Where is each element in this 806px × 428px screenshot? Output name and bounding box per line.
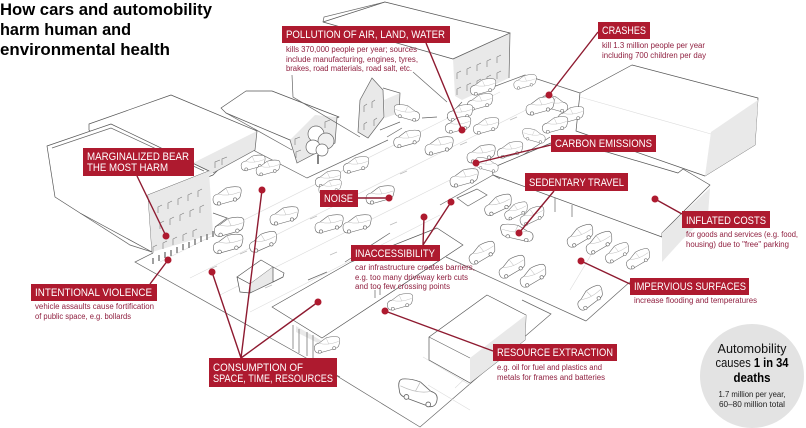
callout: crashes: including 700 children per day bbox=[602, 51, 706, 60]
callout: consumption of space, time, resources: SPACE, TIME, RESOURCES bbox=[213, 373, 333, 385]
stat circle: 1 in 34 deaths: deaths bbox=[734, 370, 770, 385]
callout: crashes: kill 1.3 million people per year bbox=[602, 41, 705, 50]
callout: crashes bbox=[546, 22, 706, 98]
building: rear block and gabled end bbox=[292, 2, 510, 138]
callout: crashes: CRASHES bbox=[602, 25, 646, 37]
callout: intentional violence: INTENTIONAL VIOLENCE bbox=[35, 287, 152, 299]
callout: marginalized: MARGINALIZED BEAR bbox=[87, 151, 189, 163]
callout: inaccessibility: INACCESSIBILITY bbox=[355, 248, 436, 260]
callout: inaccessibility: car infrastructure creates barriers, bbox=[355, 263, 475, 272]
bollards bbox=[153, 231, 213, 264]
callout: pollution: include manufacturing, engines, tyres, bbox=[286, 55, 418, 64]
callout: marginalized bbox=[83, 148, 194, 240]
callout: carbon emissions: CARBON EMISSIONS bbox=[555, 138, 652, 150]
callout: resource extraction bbox=[382, 308, 617, 382]
truck bbox=[237, 260, 284, 293]
stat circle: 1 in 34 deaths: causes 1 in 34 bbox=[716, 355, 789, 370]
callout: resource extraction: metals for frames and batteries bbox=[497, 373, 605, 382]
callout: noise: NOISE bbox=[324, 193, 353, 205]
callout: inaccessibility bbox=[351, 198, 475, 291]
building: parking-lot big box store bbox=[492, 143, 710, 262]
building: left front bbox=[47, 124, 213, 253]
callout: inflated costs: for goods and services (e.g. food, bbox=[686, 230, 798, 239]
stat circle: 1 in 34 deaths: Automobility bbox=[718, 341, 787, 356]
title bbox=[0, 0, 213, 59]
stat circle: 1 in 34 deaths: 1.7 million per year, bbox=[718, 390, 786, 399]
callout: resource extraction: e.g. oil for fuel and plastics and bbox=[497, 363, 602, 372]
callout: pollution: brakes, road materials, road salt, etc. bbox=[286, 64, 412, 73]
callout: impervious surfaces bbox=[578, 258, 757, 305]
callout: inaccessibility: e.g. too many driveway kerb cuts bbox=[355, 273, 468, 282]
ground and street outline bbox=[80, 75, 632, 427]
callout: inflated costs: housing) due to "free" parking bbox=[686, 240, 789, 249]
title: environmental health bbox=[0, 40, 170, 59]
title: harm human and bbox=[0, 20, 131, 39]
callout: pollution bbox=[282, 26, 466, 134]
callout: impervious surfaces: increase flooding and temperatures bbox=[634, 296, 757, 305]
title: How cars and automobility bbox=[0, 0, 213, 19]
callout: intentional violence bbox=[31, 256, 172, 321]
callout: pollution: POLLUTION OF AIR, LAND, WATER bbox=[286, 29, 445, 41]
callout: pollution: kills 370,000 people per year; sources bbox=[286, 45, 417, 54]
callout: carbon emissions bbox=[472, 135, 656, 166]
building: left rear bbox=[89, 95, 257, 200]
resource extraction building bbox=[429, 295, 526, 383]
gas station canopy bbox=[272, 228, 463, 359]
callout: consumption of space, time, resources bbox=[208, 186, 337, 387]
stat circle: 1 in 34 deaths: 60–80 million total bbox=[719, 400, 785, 409]
building: gabled house with tree bbox=[221, 91, 339, 164]
callout: consumption of space, time, resources: CONSUMPTION OF bbox=[213, 362, 303, 374]
callout: resource extraction: RESOURCE EXTRACTION bbox=[497, 347, 613, 359]
callout: impervious surfaces: IMPERVIOUS SURFACES bbox=[634, 281, 746, 293]
callout: sedentary travel: SEDENTARY TRAVEL bbox=[529, 177, 624, 189]
cars bbox=[213, 75, 653, 408]
callout: inaccessibility: and too few crossing points bbox=[355, 282, 450, 291]
building: right big block bbox=[576, 65, 758, 176]
stat circle: 1 in 34 deaths bbox=[700, 324, 804, 428]
callout: sedentary travel bbox=[516, 173, 628, 236]
callout: intentional violence: of public space, e.g. bollards bbox=[35, 312, 131, 321]
callout: marginalized: THE MOST HARM bbox=[87, 162, 168, 174]
callout: inflated costs: INFLATED COSTS bbox=[686, 215, 766, 227]
callout: inflated costs bbox=[652, 196, 798, 249]
callout: intentional violence: vehicle assaults cause fortification bbox=[35, 302, 154, 311]
callout: noise bbox=[320, 190, 392, 207]
